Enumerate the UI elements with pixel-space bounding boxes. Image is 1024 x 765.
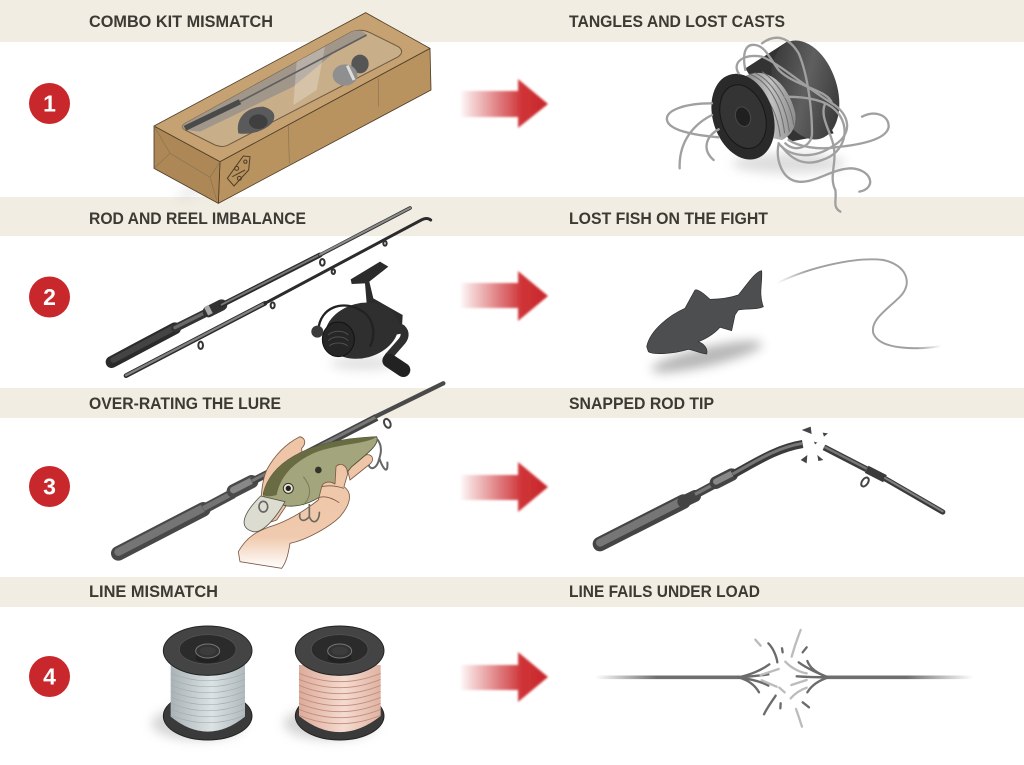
rod butt section [112,208,410,362]
number badge 4: 4 [43,664,56,690]
number badge 2: 2 [43,284,56,310]
arrow row 2 [460,271,548,321]
heading: line fails under load: LINE FAILS UNDER LOAD [569,583,760,601]
icon: rod with crankbait lure in hand [118,383,443,568]
number badge 3 [29,466,70,507]
hand back and index finger [257,437,373,527]
icon: cardboard combo kit box [154,13,431,211]
icon: price tag on box [227,156,250,186]
heading: rod and reel imbalance: ROD AND REEL IMBALANCE [89,210,306,228]
icon: lost fish silhouette with loose line [647,259,942,379]
header band row 3 [0,388,1024,418]
number badge 1: 1 [43,90,56,116]
header band row 1 [0,0,1024,42]
crankbait lure [263,437,387,506]
spool of silver line [152,626,252,740]
icon: snapped rod with shards [600,427,943,544]
heading: over-rating the lure: OVER-RATING THE LURE [89,395,281,413]
number badge 1 [29,83,70,124]
number badge 2 [29,276,70,318]
palm and front fingers [238,464,350,568]
arrow row 3 [460,462,548,512]
heading: combo kit mismatch: COMBO KIT MISMATCH [89,13,273,31]
heading: tangles and lost casts: TANGLES AND LOST CASTS [569,13,785,31]
icon: two line spools [152,626,384,740]
icon: frayed line breaking [595,630,973,727]
icon: rod sections and reel [112,208,431,376]
lure bill and belly hook [244,496,319,532]
header band row 4 [0,577,1024,607]
spool of pink line [284,626,384,740]
arrow row 4 [460,652,548,702]
header band row 2 [0,197,1024,236]
number badge 3: 3 [43,474,56,500]
heading: line mismatch: LINE MISMATCH [89,583,218,601]
heading: lost fish on the fight: LOST FISH ON THE FIGHT [569,210,768,228]
arrow row 1 [460,79,548,128]
heading: snapped rod tip: SNAPPED ROD TIP [569,395,714,413]
rod tip section [126,218,431,376]
spinning reel [311,262,405,370]
rod shards [801,427,828,463]
number badge 4 [29,656,70,697]
icon: tangled spool [667,32,889,212]
rod [118,383,443,553]
